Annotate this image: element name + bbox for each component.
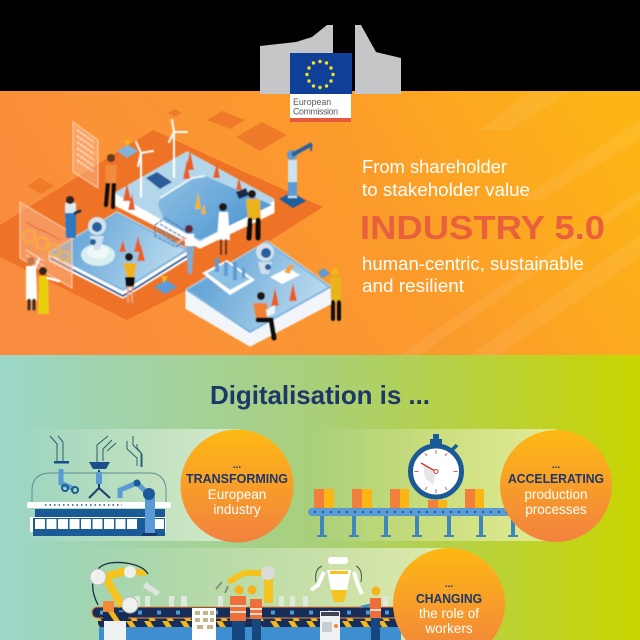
- platform: bottom right: [187, 242, 330, 345]
- icon: control cabinets: [192, 608, 340, 640]
- light strip: [20, 429, 240, 541]
- floating list screen: [155, 218, 186, 247]
- light strip: [80, 548, 450, 640]
- panel: transforming: [20, 429, 294, 542]
- worker: white coat: [26, 257, 39, 309]
- icon: conveyor belt: [92, 607, 402, 640]
- platform: top right: [117, 153, 273, 247]
- circle: accelerating label: ACCELERATING: [508, 471, 604, 486]
- illustration: smart factory: [20, 120, 342, 345]
- worker: dark trousers: [105, 154, 117, 207]
- worker: hard hat: [330, 268, 342, 319]
- circle: transforming label: [180, 430, 294, 542]
- traffic cones: [119, 150, 297, 306]
- hero text block: [360, 157, 605, 296]
- hero panel: orange background: [0, 91, 640, 355]
- circle: transforming label: ...: [233, 460, 241, 471]
- logo stars: [305, 60, 335, 89]
- icon: boxes: [314, 489, 484, 508]
- logo red bar: [290, 118, 351, 122]
- circle: transforming label: TRANSFORMING: [186, 471, 288, 486]
- panel: accelerating: [308, 429, 612, 542]
- icon: stopwatch: [410, 434, 462, 497]
- light strip: [310, 429, 556, 541]
- icon: production line with robot arms: [27, 436, 171, 536]
- worker: yellow shirt: [236, 188, 261, 238]
- black header band: [0, 0, 640, 91]
- icon: white humanoid robot: [311, 557, 362, 602]
- icon: parts on belt: [135, 596, 388, 607]
- worker: jeans: [177, 225, 194, 274]
- panel: changing: [80, 548, 505, 640]
- lower panel: digitalisation background: [0, 355, 640, 640]
- wind turbines: [136, 120, 187, 197]
- icon: conveyor rail: [308, 508, 513, 516]
- icon: conveyor legs: [317, 516, 518, 537]
- worker: lab coat: [217, 203, 230, 254]
- tagline: From shareholder: [362, 157, 507, 177]
- boxes: [117, 140, 330, 294]
- worker: yellow overalls: [38, 267, 59, 314]
- data screen one: [73, 122, 98, 188]
- circle: accelerating label: production: [524, 487, 588, 502]
- hero text block: and resilient: [362, 276, 464, 296]
- workers in vests: [230, 586, 381, 640]
- platform: left: [50, 213, 187, 297]
- circle: changing label: workers: [424, 621, 473, 636]
- logo: European Commission: Commission: [293, 106, 338, 116]
- logo: European Commission: [260, 25, 401, 122]
- circle: changing label: [393, 548, 505, 640]
- hero text block: to stakeholder value: [362, 180, 530, 200]
- worker: black skirt: [123, 253, 137, 302]
- data screen two: [20, 202, 72, 288]
- solar panel: [146, 172, 172, 189]
- main heading: INDUSTRY 5.0: [360, 209, 605, 246]
- heading: Digitalisation is: Digitalisation is ...: [210, 380, 430, 410]
- circle: transforming label: European: [208, 487, 266, 502]
- circle: changing label: the role of: [419, 606, 479, 621]
- logo building: [260, 25, 401, 94]
- worker: seated with laptop: [253, 292, 275, 338]
- circle: accelerating label: processes: [525, 502, 587, 517]
- icon: yellow robot centre: [216, 566, 275, 603]
- workers: [26, 154, 342, 338]
- logo flag: [290, 53, 352, 94]
- circle: accelerating label: ...: [552, 460, 560, 471]
- subheading: human-centric, sustainable: [362, 254, 584, 274]
- circle: changing label: ...: [445, 579, 453, 590]
- circle: transforming label: industry: [213, 502, 261, 517]
- worker: blue overalls: [65, 196, 80, 238]
- robot arm crane: [279, 144, 312, 208]
- logo white label: [290, 94, 351, 118]
- circle: changing label: CHANGING: [416, 591, 482, 606]
- logo wordmark: European: [293, 97, 331, 107]
- circle: accelerating label: [500, 430, 612, 542]
- icon: yellow robot left: [90, 562, 160, 640]
- humanoid robots: [88, 217, 274, 274]
